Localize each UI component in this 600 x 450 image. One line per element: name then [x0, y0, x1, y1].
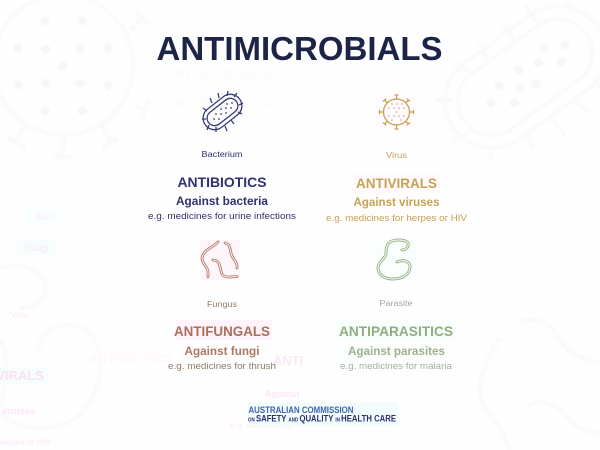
- subheading: against bacteria: Against bacteria: [176, 194, 268, 208]
- example text: e.g. medicines for urine infections: [148, 211, 296, 222]
- ghost text artefacts: e.g. medicines for urine infections: [68, 420, 188, 429]
- background icon: large bacterium: [426, 0, 600, 167]
- ghost text artefacts: ANTIMICROBIALS: [164, 95, 286, 111]
- ghost text artefacts: ANTI: [273, 353, 303, 368]
- heading: antibiotics: ANTIBIOTICS: [178, 174, 266, 190]
- ghost text artefacts: Virus: [11, 311, 29, 320]
- ghost text artefacts: Against bacteria: [96, 388, 160, 398]
- heading: antifungals: ANTIFUNGALS: [174, 323, 270, 339]
- ghost text artefacts: ANTIBIOTICS: [88, 351, 172, 366]
- logo line 2: ON SAFETY AND QUALITY IN HEALTH CARE: [248, 414, 396, 424]
- icon: fungus: [202, 242, 237, 277]
- ghost text artefacts: Fung: [25, 243, 47, 254]
- subheading: against parasites: Against parasites: [348, 344, 445, 358]
- heading: antivirals: ANTIVIRALS: [356, 175, 437, 191]
- icon: bacterium: [198, 90, 247, 134]
- example text: e.g. medicines for herpes or HIV: [326, 213, 468, 224]
- icon: virus: [380, 95, 414, 129]
- panel: antifungals: [168, 240, 276, 372]
- label: parasite: Parasite: [380, 298, 413, 308]
- ghost text artefacts: viruses: [2, 406, 36, 417]
- example text: e.g. medicines for malaria: [340, 361, 453, 372]
- background icon: large parasite: [0, 266, 100, 428]
- ghost text artefacts: herpes or HIV: [0, 437, 52, 447]
- ghost text artefacts: e.g. medicines for: [230, 421, 294, 430]
- panel: antivirals: [326, 95, 468, 224]
- label: bacterium: Bacterium: [202, 149, 242, 159]
- heading: antiparasitics: ANTIPARASITICS: [339, 323, 453, 339]
- panel: antiparasitics: [337, 240, 456, 373]
- background icon: large fungus: [480, 320, 600, 450]
- label: fungus: Fungus: [207, 299, 237, 309]
- example text: e.g. medicines for thrush: [168, 361, 276, 372]
- icon: parasite: [378, 240, 410, 279]
- ghost text artefacts: Bact: [35, 212, 54, 222]
- title: ANTIMICROBIALS: [156, 30, 442, 67]
- label: virus: Virus: [386, 150, 407, 160]
- subheading: against viruses: Against viruses: [354, 195, 440, 209]
- ghost text artefacts: Against: [265, 389, 300, 400]
- subheading: against fungi: Against fungi: [184, 344, 260, 358]
- ghost text artefacts: ANTIMICROBIALS: [164, 65, 286, 81]
- logo line 1: AUSTRALIAN COMMISSION: [248, 405, 354, 416]
- background icon: large virus: [0, 0, 149, 157]
- logo: Australian Commission on Safety and Quality in Health Care: [248, 402, 398, 426]
- ghost text artefacts: [0, 65, 303, 447]
- panel: antibiotics: [148, 90, 296, 222]
